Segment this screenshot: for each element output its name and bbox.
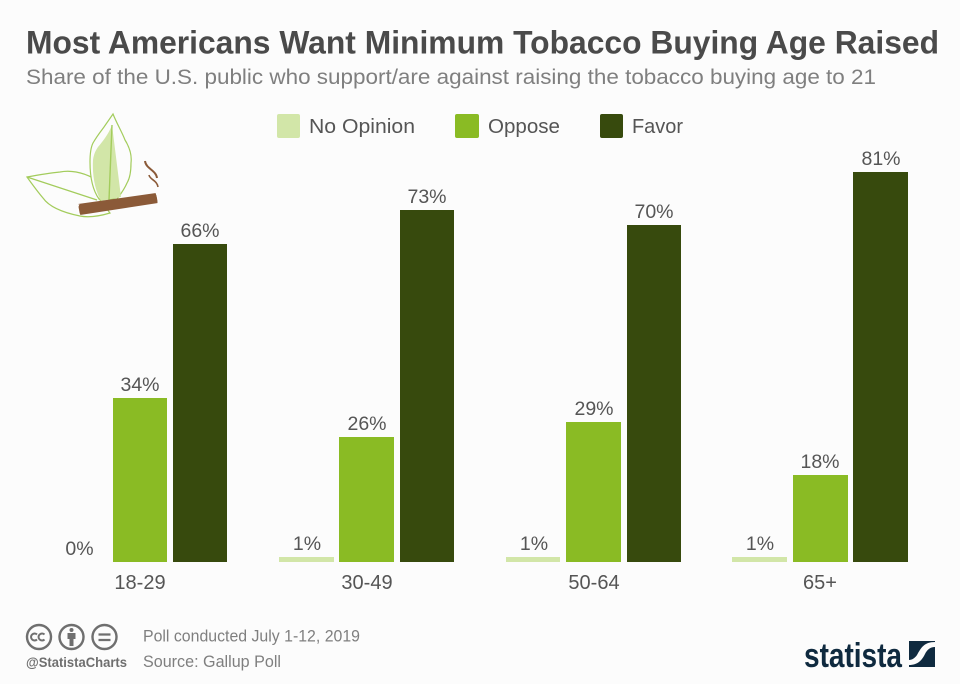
group: 18-29: 18-29 [114,572,166,594]
group: 65+: 18% [800,451,840,473]
poll note: Poll conducted July 1-12, 2019 [143,628,360,646]
legend item: Oppose [455,114,560,138]
subtitle: Share of the U.S. public who support/are against raising the tobacco buying age to 21 [26,65,876,89]
group: 65+: 65+ [803,572,837,594]
group: 50-64 [506,201,681,594]
bar chart [65,148,908,594]
group: 50-64: 1% [520,533,548,555]
group: 30-49: 1% [293,533,321,555]
icon: creative commons licence [27,625,116,649]
legend item: No Opinion: No Opinion [309,116,415,138]
group: 30-49 [279,186,454,594]
handle: @StatistaCharts [26,654,127,670]
group: 30-49: 73% [407,186,447,208]
group: 50-64: 50-64 [568,572,620,594]
group: 65+: 1% [746,533,774,555]
group: 65+: 81% [861,148,901,170]
group: 65+ [732,148,908,594]
legend item: Favor: Favor [632,116,683,138]
group: 50-64: 70% [634,201,674,223]
legend [277,114,683,138]
statista logo: statista [804,637,903,675]
group: 18-29 [65,220,227,594]
legend item: Favor [600,114,683,138]
group: 18-29: 34% [120,374,160,396]
group: 18-29: 66% [180,220,220,242]
title: Most Americans Want Minimum Tobacco Buying Age Raised [26,24,939,60]
group: 30-49: 30-49 [341,572,393,594]
legend item: Oppose: Oppose [488,116,560,138]
group: 18-29: 0% [65,538,94,560]
source: Source: Gallup Poll [143,653,281,671]
group: 50-64: 29% [574,398,614,420]
legend item: No Opinion [277,114,415,138]
icon: tobacco leaves and cigar [27,114,158,217]
group: 30-49: 26% [347,413,387,435]
